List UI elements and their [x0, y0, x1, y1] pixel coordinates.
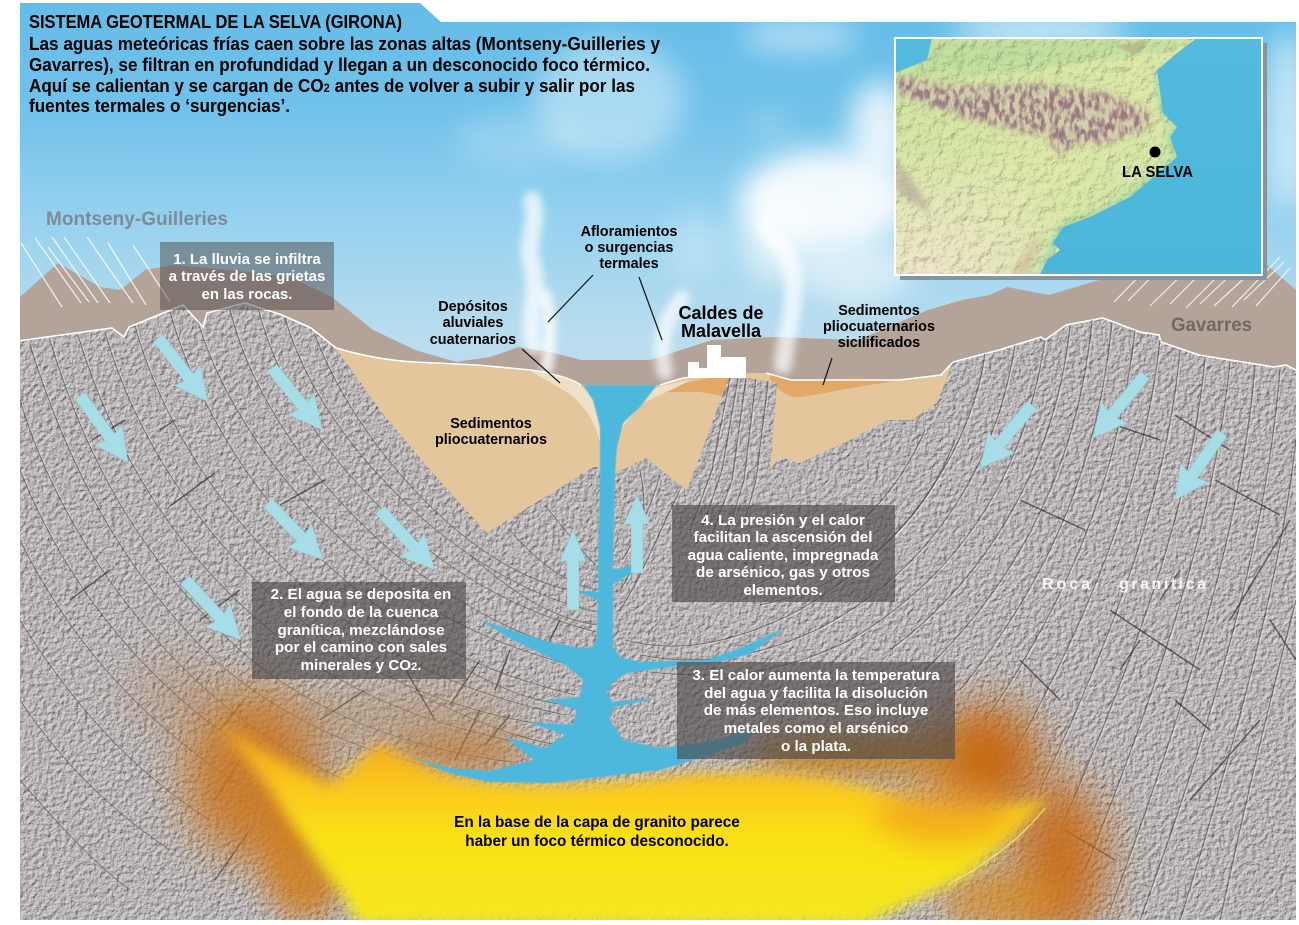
title and intro: Aquí se calientan y se cargan de CO2 antes de volver a subir y salir por las: [29, 75, 635, 96]
label: afloramientos: o surgencias: [585, 240, 673, 256]
callout 4: elementos.: [743, 582, 823, 599]
heat source: yellow focus: [216, 723, 1049, 925]
label: Roca granítica: Roca: [1042, 576, 1090, 593]
callout 2: minerales y CO2.: [301, 657, 421, 674]
label: depósitos aluviales: cuaternarios: [430, 332, 516, 348]
town buildings: [688, 345, 746, 378]
label: sedimentos sicilificados: pliocuaternarios: [823, 319, 935, 335]
map marker: La Selva: [1150, 146, 1160, 158]
callout 1: [160, 242, 334, 310]
callout 4: facilitan la ascensión del: [694, 529, 872, 546]
sky background: [20, 3, 1296, 362]
callout 4: [672, 505, 895, 602]
callout 1: en las rocas.: [202, 286, 292, 303]
label: afloramientos: Afloramientos: [581, 224, 677, 240]
heat halo: orange zones: [130, 655, 1105, 925]
callout 4: 4. La presión y el calor: [701, 512, 865, 529]
callout 3: o la plata.: [781, 738, 851, 755]
heat source: pale edge line: [947, 808, 1045, 885]
title and intro: fuentes termales o ‘surgencias’.: [29, 95, 290, 116]
heat overlay: orange-yellow right fade: [875, 785, 1015, 845]
granite rock mass: [20, 303, 1296, 920]
sediment layer: [336, 349, 952, 533]
callout 1: 1. La lluvia se infiltra: [173, 251, 321, 268]
label: Caldes de Malavella: Caldes de: [678, 303, 764, 323]
callout 2: [252, 582, 466, 679]
rain hatching right: [1114, 257, 1290, 308]
label: sedimentos pliocuaternarios: Sedimentos: [450, 416, 532, 432]
background mountains: [20, 263, 1296, 385]
label: depósitos aluviales: Depósitos: [438, 299, 508, 315]
callout 1: a través de las grietas: [169, 268, 325, 285]
steam plumes: [530, 200, 794, 372]
callout 2: 2. El agua se deposita en: [271, 586, 451, 603]
callout 3: 3. El calor aumenta la temperatura: [692, 667, 940, 684]
label: sedimentos sicilificados: [823, 303, 935, 351]
title and intro: Las aguas meteóricas frías caen sobre las zonas altas (Montseny-Guilleries y: [29, 33, 661, 54]
label: afloramientos: termales: [599, 256, 659, 272]
callout 3: [677, 662, 955, 759]
caption: foco térmico: [454, 814, 740, 850]
label: sedimentos sicilificados: sicilificados: [838, 335, 920, 351]
label: sedimentos pliocuaternarios: pliocuaternarios: [435, 432, 547, 448]
callout 3: del agua y facilita la disolución: [704, 685, 928, 702]
rain hatching left: [21, 237, 170, 307]
label: sedimentos pliocuaternarios: [435, 416, 547, 448]
callout 2: granítica, mezclándose: [277, 622, 445, 639]
label: Caldes de Malavella: Malavella: [681, 321, 762, 341]
callout 4: de arsénico, gas y otros: [696, 564, 870, 581]
caption: foco térmico: En la base de la capa de granito parece: [454, 814, 740, 831]
clouds: [455, 16, 1299, 302]
silicified sediments: [666, 375, 892, 398]
water channels: [412, 385, 787, 783]
label: Roca granítica: granítica: [1119, 576, 1206, 593]
title and intro: Gavarres), se filtran en profundidad y llegan a un desconocido foco térmico.: [29, 54, 650, 75]
title and intro: [29, 11, 661, 116]
label: Roca granítica: [1042, 576, 1206, 593]
callout 2: por el camino con sales: [275, 639, 447, 656]
arrows: descending water: [66, 328, 1236, 652]
label: Caldes de Malavella: [678, 303, 764, 341]
title and intro: SISTEMA GEOTERMAL DE LA SELVA (GIRONA): [29, 11, 402, 32]
label: afloramientos: [581, 224, 677, 272]
rock strata and fractures: [20, 308, 1297, 921]
callout 3: metales como el arsénico: [724, 720, 908, 737]
label: depósitos aluviales: aluviales: [443, 315, 503, 331]
callout 4: agua caliente, impregnada: [688, 547, 879, 564]
map shadow: [900, 43, 1267, 280]
alluvial deposits: [530, 371, 690, 450]
callout 2: el fondo de la cuenca: [284, 604, 439, 621]
leader lines: [522, 275, 832, 385]
arrows: rising water: [560, 495, 650, 610]
inset location map: [895, 38, 1262, 275]
callout 3: de más elementos. Eso incluye: [704, 702, 928, 719]
surface line: [336, 348, 953, 385]
map label: LA SELVA: [1122, 164, 1193, 181]
caption: foco térmico: haber un foco térmico desconocido.: [465, 833, 729, 850]
label: depósitos aluviales: [430, 299, 516, 348]
label: Montseny-Guilleries: Montseny-Guilleries: [46, 209, 228, 230]
label: sedimentos sicilificados: Sedimentos: [838, 303, 920, 319]
label: Gavarres: Gavarres: [1171, 315, 1252, 336]
rock edge highlight: [20, 303, 1296, 370]
